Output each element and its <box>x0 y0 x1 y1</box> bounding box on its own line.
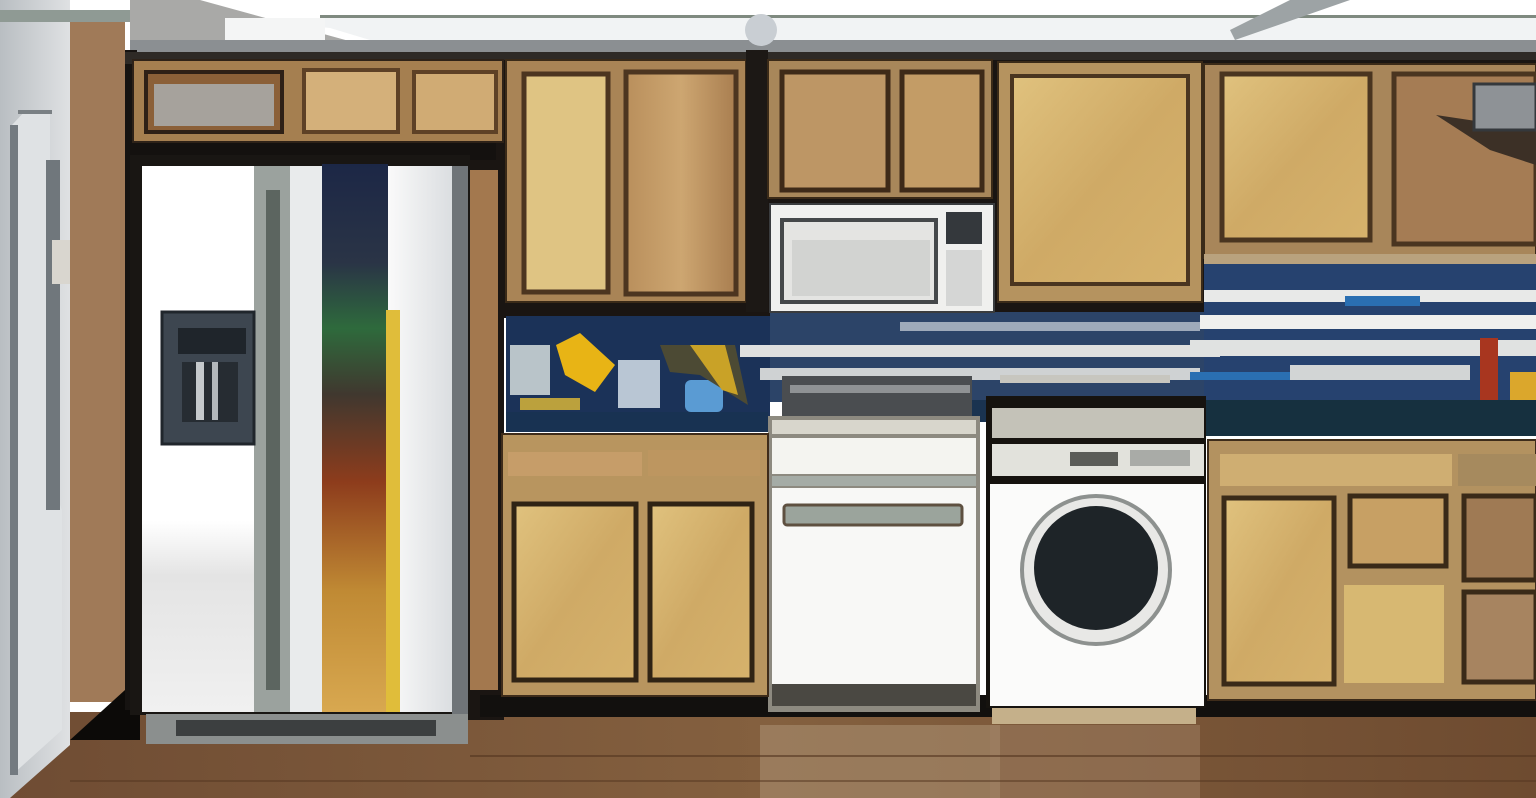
refrigerator <box>130 155 498 744</box>
lower cabinets left <box>502 434 768 696</box>
counter tops <box>506 400 1536 436</box>
floor <box>0 712 1536 798</box>
stove <box>768 376 980 712</box>
icon: water dispenser <box>162 312 254 444</box>
ceiling <box>0 0 1536 60</box>
upper cabinets above fridge <box>133 60 503 142</box>
large upper cabinet <box>998 62 1202 302</box>
dark cabinet backing <box>125 52 1536 720</box>
upper cabinets center-left <box>506 50 768 312</box>
items on counter <box>510 333 1536 412</box>
upper cabinets over microwave <box>768 60 992 198</box>
left wall and door <box>0 0 140 798</box>
backsplash <box>506 264 1536 416</box>
microwave <box>770 204 994 312</box>
upper cabinets right <box>1204 64 1536 264</box>
lower cabinets right <box>1208 440 1536 700</box>
washing machine <box>986 396 1206 724</box>
